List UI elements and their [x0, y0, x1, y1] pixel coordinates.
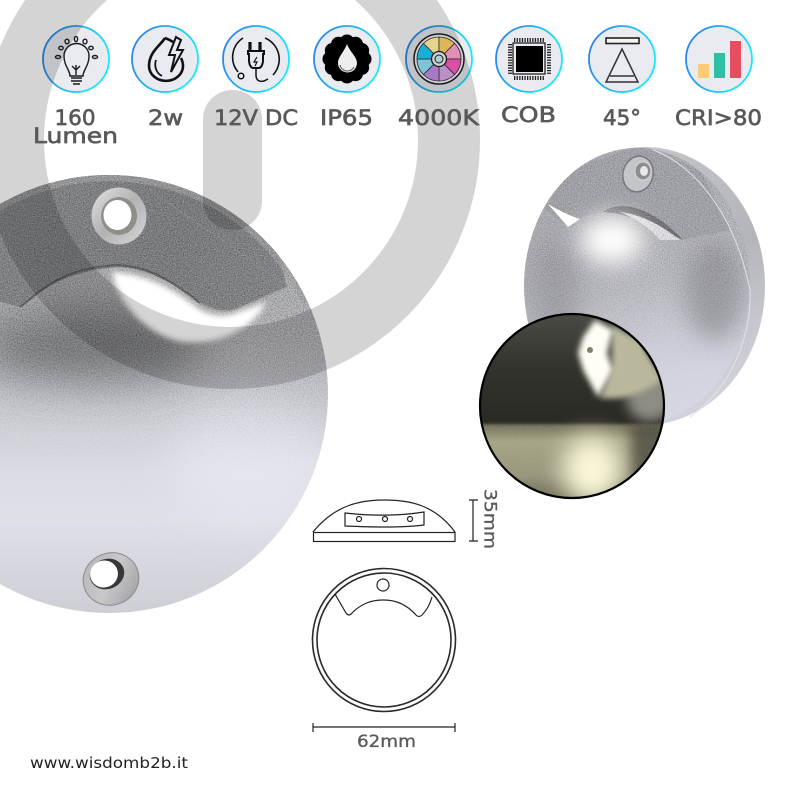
icon: water drop on scalloped badge, IP65 [314, 26, 380, 92]
technical drawing: front view [312, 568, 456, 712]
dimension: height 35mm: 35mm [480, 489, 500, 549]
label: IP65: IP65 [320, 106, 373, 131]
label: 45 degrees: 45° [603, 106, 641, 131]
circular inset: warm light effect [478, 312, 666, 500]
website address: www.wisdomb2b.it [30, 754, 188, 772]
background power symbol [13, 0, 449, 358]
label: COB: COB [501, 103, 556, 128]
icon: COB chip [496, 26, 562, 92]
label: CRI>80: CRI>80 [675, 106, 762, 131]
icon: colour temperature wheel, 4000K [406, 26, 472, 92]
dimension: width 62mm: 62mm [357, 732, 416, 752]
large product photo: round silver wall light [0, 170, 340, 620]
icon: CRI bar chart [686, 26, 752, 92]
label: 160 Lumen: Lumen [33, 124, 118, 149]
bottom mounting hole [76, 545, 146, 613]
label: 12V DC: 12V DC [214, 106, 298, 131]
icon: beam angle, 45 degrees [589, 26, 655, 92]
label: 160 Lumen [33, 106, 118, 149]
dimension: height 35mm [469, 489, 500, 549]
dimension: width 62mm [313, 723, 455, 752]
technical drawing: side view [313, 500, 455, 542]
icon: energy flame with bolt, 2w [132, 26, 198, 92]
top mounting hole [92, 188, 146, 244]
label: 160 Lumen: 160 [54, 106, 96, 131]
label: 4000K: 4000K [398, 106, 480, 131]
icon: light bulb, 160 lumen [43, 26, 109, 92]
icon: power plug, 12V DC [223, 26, 289, 92]
small product photo: angled view [524, 147, 765, 424]
label: 2w: 2w [148, 106, 183, 131]
mounting hole [619, 153, 657, 195]
